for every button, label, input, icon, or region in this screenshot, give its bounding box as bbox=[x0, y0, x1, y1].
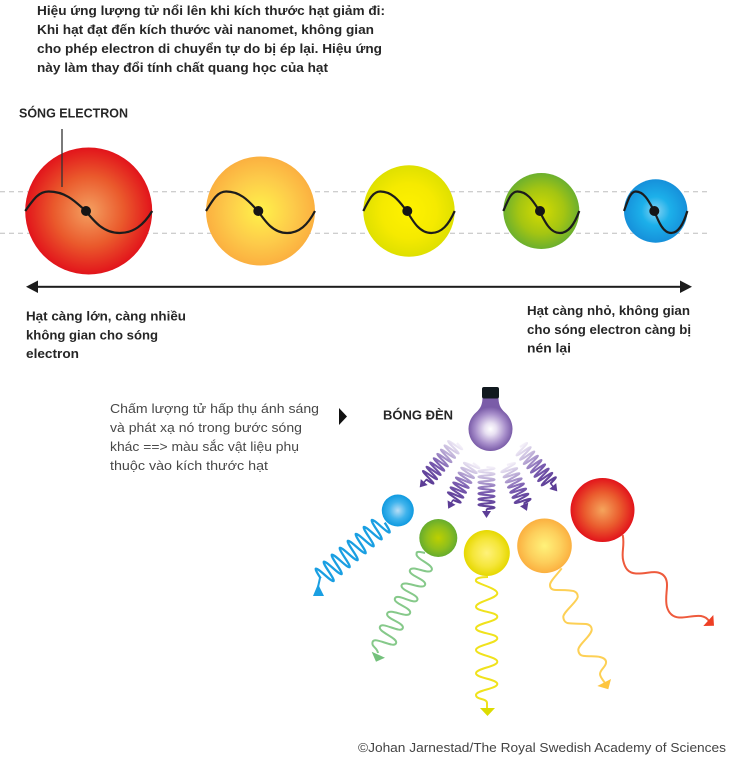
caption: larger particle bbox=[26, 309, 186, 361]
explanation text: khác ==> màu sắc vật liệu phụ bbox=[110, 439, 299, 454]
particle: orange bbox=[206, 156, 315, 266]
caption: larger particle: Hạt càng lớn, càng nhiều bbox=[26, 309, 186, 324]
light wave 3 bbox=[478, 467, 494, 518]
caption: larger particle: electron bbox=[26, 346, 79, 361]
emission wave: blue bbox=[313, 515, 392, 596]
particle: blue bbox=[382, 494, 414, 526]
caption: smaller particle: nén lại bbox=[527, 341, 571, 356]
explanation text bbox=[110, 402, 319, 473]
explanation text: thuộc vào kích thước hạt bbox=[110, 459, 269, 473]
top row of particles with electron waves bbox=[25, 148, 687, 274]
particle: green bbox=[503, 173, 579, 249]
particle: yellow bbox=[464, 530, 510, 576]
caption: larger particle: không gian cho sóng bbox=[26, 328, 158, 342]
caption: smaller particle bbox=[527, 303, 691, 356]
particle: yellow bbox=[363, 165, 455, 257]
explanation text: và phát xạ nó trong bước sóng bbox=[110, 421, 302, 435]
light wave 1 bbox=[414, 438, 463, 493]
light wave 4 bbox=[500, 462, 534, 514]
emission wave: yellow bbox=[476, 577, 497, 716]
heading text: cho phép electron di chuyển tự do bị ép lại. Hiệu ứng bbox=[37, 41, 382, 56]
particle: red, largest bbox=[25, 148, 152, 274]
heading text: Hiệu ứng lượng tử nổi lên khi kích thước hạt giảm đi: bbox=[37, 3, 385, 18]
heading text: này làm thay đổi tính chất quang học của hạt bbox=[37, 60, 329, 75]
caption: smaller particle: Hạt càng nhỏ, không gian bbox=[527, 303, 690, 318]
light wave 5 bbox=[514, 442, 563, 497]
dashed guide lines bbox=[0, 192, 708, 233]
copyright credit: ©Johan Jarnestad/The Royal Swedish Academy of Sciences bbox=[358, 741, 726, 755]
explanation text: Chấm lượng tử hấp thụ ánh sáng bbox=[110, 402, 319, 416]
label: light bulb: BÓNG ĐÈN bbox=[383, 408, 453, 422]
particle: blue, smallest bbox=[624, 179, 687, 243]
label: electron wave: SÓNG ELECTRON bbox=[19, 106, 128, 120]
caption: smaller particle: cho sóng electron càng bị bbox=[527, 322, 691, 337]
particle: orange bbox=[517, 518, 572, 573]
heading text bbox=[37, 3, 385, 75]
emission wave: green bbox=[372, 552, 432, 662]
particle: red bbox=[570, 478, 634, 542]
purple light waves from bulb bbox=[414, 438, 563, 518]
emission wave: red bbox=[623, 535, 714, 626]
double-headed size arrow bbox=[26, 280, 692, 293]
lower row of particles bbox=[382, 478, 634, 576]
emission wave: orange bbox=[550, 568, 611, 689]
small pointer triangle bbox=[339, 408, 347, 425]
light wave 2 bbox=[441, 459, 480, 513]
particle: green bbox=[419, 519, 457, 557]
leader line from label to wave bbox=[61, 129, 63, 187]
heading text: Khi hạt đạt đến kích thước vài nanomet, không gian bbox=[37, 22, 374, 37]
icon: light bulb bbox=[469, 387, 512, 451]
